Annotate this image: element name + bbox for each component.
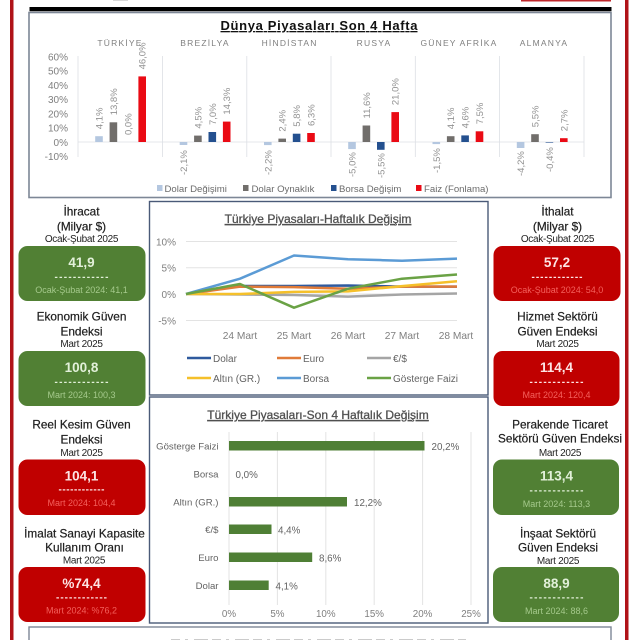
KPI: inşaat sektörü bbox=[493, 526, 619, 622]
KPI: perakende ticaret bbox=[493, 418, 622, 515]
line chart x axis: 28 Mart bbox=[439, 331, 473, 342]
KPI: reel kesim: Mart 2024: 104,4 bbox=[47, 498, 116, 508]
KPI: imalat sanayi: Mart 2024: %76,2 bbox=[46, 606, 117, 616]
x axis labels: 0% bbox=[222, 609, 236, 620]
horizontal bars bbox=[229, 441, 424, 590]
bar value labels: -1,5% bbox=[432, 148, 443, 173]
KPI: ekonomik güven: Mart 2025 bbox=[60, 339, 103, 350]
category labels: €/$ bbox=[205, 525, 219, 536]
country headers: BREZİLYA bbox=[180, 38, 230, 48]
legend: line chart: Euro bbox=[303, 354, 325, 365]
KPI: perakende ticaret: Mart 2025 bbox=[539, 448, 582, 459]
bar value labels: -0,4% bbox=[545, 147, 556, 172]
x axis labels: 5% bbox=[270, 609, 285, 620]
category labels: Gösterge Faizi bbox=[156, 442, 218, 452]
category labels: Altın (GR.) bbox=[173, 498, 218, 508]
legend: line chart: Borsa bbox=[303, 374, 330, 385]
country headers: GÜNEY AFRİKA bbox=[420, 38, 498, 48]
value labels: 0,0% bbox=[236, 470, 258, 481]
line chart x axis: 27 Mart bbox=[385, 331, 419, 342]
country headers: HİNDİSTAN bbox=[262, 38, 318, 48]
legend: world markets: Dolar Değişimi bbox=[164, 184, 227, 195]
KPI: ekonomik güven: Ekonomik Güven bbox=[37, 310, 126, 324]
country headers: TÜRKİYE bbox=[97, 38, 143, 48]
bar value labels: 4,1% bbox=[94, 107, 106, 129]
y axis labels: 10% bbox=[48, 124, 68, 135]
line chart y axis: 0% bbox=[162, 290, 176, 301]
category labels: Euro bbox=[198, 553, 218, 564]
legend: line chart bbox=[187, 354, 458, 385]
y axis labels bbox=[45, 52, 68, 163]
bar value labels: 7,5% bbox=[475, 102, 486, 124]
line chart x axis bbox=[223, 331, 473, 342]
value labels: 8,6% bbox=[319, 554, 342, 564]
line chart y axis: -5% bbox=[158, 316, 176, 328]
legend: world markets: Faiz (Fonlama) bbox=[424, 184, 489, 195]
line chart x axis: 25 Mart bbox=[277, 331, 311, 342]
KPI: imalat sanayi: Mart 2025 bbox=[63, 556, 106, 566]
legend: world markets: Borsa Değişim bbox=[339, 184, 401, 195]
bar value labels: 2,7% bbox=[559, 109, 570, 131]
KPI: perakende ticaret: Perakende Ticaret bbox=[512, 418, 609, 432]
KPI: ekonomik güven bbox=[18, 310, 146, 406]
KPI: imalat sanayi: %74,4 bbox=[62, 576, 101, 591]
x axis labels: 20% bbox=[413, 609, 433, 620]
KPI: inşaat sektörü: 88,9 bbox=[543, 576, 570, 591]
country headers bbox=[97, 38, 568, 48]
bar value labels: 4,5% bbox=[193, 106, 204, 129]
KPI: ihracat: İhracat bbox=[63, 204, 100, 218]
heading: weekly change: Türkiye Piyasaları-Haftalık Değişim bbox=[225, 212, 411, 226]
KPI: ithalat: (Milyar $) bbox=[533, 220, 582, 234]
y axis labels: 50% bbox=[48, 67, 68, 78]
header rule bbox=[30, 7, 612, 12]
KPI: ekonomik güven: Mart 2024: 100,3 bbox=[47, 390, 116, 400]
KPI: hizmet sektörü: ------------ bbox=[530, 377, 584, 388]
bar value labels: -5,0% bbox=[348, 152, 358, 177]
value labels: 4,1% bbox=[276, 582, 298, 592]
bar value labels: 13,8% bbox=[109, 88, 120, 115]
category labels: Borsa bbox=[193, 470, 219, 480]
value labels: 4,4% bbox=[278, 526, 301, 536]
bar value labels: 5,5% bbox=[530, 105, 542, 127]
KPI: ekonomik güven: 100,8 bbox=[65, 360, 99, 375]
value labels bbox=[236, 442, 460, 592]
bar value labels: 0,0% bbox=[123, 113, 134, 135]
bar value labels: 14,3% bbox=[222, 87, 233, 115]
legend: line chart: Altın (GR.) bbox=[213, 374, 260, 385]
heading: 4-week change: Türkiye Piyasaları-Son 4 Haftalık Değişim bbox=[207, 408, 429, 422]
category labels: Dolar bbox=[196, 581, 219, 592]
legend: line chart: Gösterge Faizi bbox=[393, 374, 458, 385]
KPI: reel kesim bbox=[18, 418, 146, 515]
y axis labels: 30% bbox=[48, 95, 68, 106]
panel: weekly line chart bbox=[150, 202, 488, 395]
KPI: perakende ticaret: Mart 2024: 113,3 bbox=[523, 499, 590, 509]
legend: world markets bbox=[157, 184, 489, 195]
KPI: hizmet sektörü: Hizmet Sektörü bbox=[517, 310, 598, 324]
KPI: ithalat bbox=[494, 204, 620, 301]
legend: line chart: Dolar bbox=[213, 354, 238, 365]
KPI: ithalat: ------------ bbox=[532, 272, 582, 283]
panel: footer note bbox=[29, 627, 611, 640]
bar value labels: -5,5% bbox=[376, 153, 387, 178]
KPI: inşaat sektörü: İnşaat Sektörü bbox=[520, 526, 596, 540]
line chart y axis bbox=[156, 238, 176, 328]
bar value labels: -4,2% bbox=[516, 151, 527, 176]
KPI: ithalat: İthalat bbox=[541, 204, 574, 218]
KPI: reel kesim: ------------ bbox=[58, 484, 104, 496]
bar value labels bbox=[94, 42, 570, 178]
bars: borsa değişim bbox=[208, 132, 553, 150]
heading: world markets: Dünya Piyasaları Son 4 Hafta bbox=[220, 18, 418, 33]
country headers: ALMANYA bbox=[520, 38, 568, 48]
KPI: inşaat sektörü: Güven Endeksi bbox=[518, 540, 598, 554]
line chart y axis: 10% bbox=[156, 238, 176, 248]
legend: line chart: €/$ bbox=[393, 354, 407, 365]
KPI: ithalat: Ocak-Şubat 2024: 54,0 bbox=[511, 285, 603, 295]
bars: dolar oynaklık bbox=[110, 122, 539, 142]
bar value labels: -2,1% bbox=[179, 150, 190, 175]
KPI: inşaat sektörü: Mart 2025 bbox=[537, 556, 580, 567]
KPI: imalat sanayi bbox=[18, 526, 146, 622]
bar value labels: 4,6% bbox=[461, 106, 472, 128]
y axis labels: -10% bbox=[45, 152, 68, 163]
bar value labels: 2,4% bbox=[278, 109, 289, 132]
line series bbox=[186, 256, 457, 308]
bar value labels: 46,0% bbox=[138, 42, 149, 69]
KPI: hizmet sektörü: Güven Endeksi bbox=[517, 324, 598, 338]
bar value labels: -2,2% bbox=[263, 150, 274, 175]
y axis labels: 20% bbox=[48, 110, 68, 120]
KPI: perakende ticaret: 113,4 bbox=[540, 468, 574, 484]
header remnant: logo and red box bbox=[113, 0, 611, 2]
bar value labels: 5,8% bbox=[292, 104, 303, 127]
KPI: ihracat: ------------ bbox=[54, 272, 108, 283]
KPI: imalat sanayi: Kullanım Oranı bbox=[45, 540, 124, 554]
bar value labels: 6,3% bbox=[306, 104, 318, 126]
KPI: imalat sanayi: ------------ bbox=[56, 592, 107, 604]
y axis labels: 40% bbox=[48, 81, 68, 92]
legend: world markets: Dolar Oynaklık bbox=[252, 184, 315, 195]
panel: 4-week bar chart bbox=[150, 397, 488, 623]
KPI: hizmet sektörü: Mart 2024: 120,4 bbox=[522, 390, 591, 400]
KPI: ithalat: 57,2 bbox=[544, 255, 570, 270]
bar value labels: 11,6% bbox=[362, 92, 373, 118]
y axis labels: 0% bbox=[54, 138, 68, 149]
country headers: RUSYA bbox=[357, 38, 391, 48]
panel: world markets bbox=[29, 12, 611, 198]
KPI: hizmet sektörü: 114,4 bbox=[540, 360, 574, 375]
x axis labels: 25% bbox=[461, 609, 481, 620]
x axis labels: 15% bbox=[364, 609, 384, 620]
line chart x axis: 24 Mart bbox=[223, 331, 257, 342]
KPI: ihracat: 41,9 bbox=[68, 255, 95, 270]
KPI: ithalat: Ocak-Şubat 2025 bbox=[521, 234, 595, 245]
bars: dolar değişimi bbox=[95, 136, 524, 149]
KPI: ihracat bbox=[18, 204, 146, 301]
KPI: reel kesim: Endeksi bbox=[61, 432, 102, 446]
KPI: reel kesim: Mart 2025 bbox=[60, 448, 103, 459]
category labels bbox=[156, 442, 219, 592]
bar value labels: 7,0% bbox=[208, 103, 219, 125]
KPI: reel kesim: Reel Kesim Güven bbox=[32, 418, 131, 432]
value labels: 12,2% bbox=[354, 498, 382, 509]
KPI: imalat sanayi: İmalat Sanayi Kapasite bbox=[24, 526, 145, 540]
KPI: ihracat: (Milyar $) bbox=[57, 220, 106, 234]
KPI: hizmet sektörü bbox=[494, 310, 620, 406]
value labels: 20,2% bbox=[432, 442, 460, 453]
KPI: ekonomik güven: Endeksi bbox=[61, 324, 102, 338]
x axis labels bbox=[222, 609, 481, 620]
line chart y axis: 5% bbox=[162, 264, 176, 274]
x axis labels: 10% bbox=[316, 609, 336, 620]
KPI: ihracat: Ocak-Şubat 2024: 41,1 bbox=[35, 285, 128, 295]
y axis labels: 60% bbox=[48, 52, 68, 64]
KPI: ihracat: Ocak-Şubat 2025 bbox=[45, 234, 119, 245]
line chart x axis: 26 Mart bbox=[331, 331, 365, 342]
KPI: ekonomik güven: ------------ bbox=[54, 377, 108, 388]
bar value labels: 4,1% bbox=[446, 107, 457, 129]
KPI: perakende ticaret: Sektörü Güven Endeksi bbox=[498, 432, 622, 446]
bars: faiz bbox=[138, 76, 568, 142]
KPI: perakende ticaret: ------------ bbox=[530, 486, 584, 496]
bar value labels: 21,0% bbox=[391, 78, 402, 105]
KPI: inşaat sektörü: ------------ bbox=[530, 592, 584, 604]
KPI: reel kesim: 104,1 bbox=[65, 468, 99, 484]
KPI: inşaat sektörü: Mart 2024: 88,6 bbox=[525, 606, 588, 616]
KPI: hizmet sektörü: Mart 2025 bbox=[536, 339, 579, 350]
